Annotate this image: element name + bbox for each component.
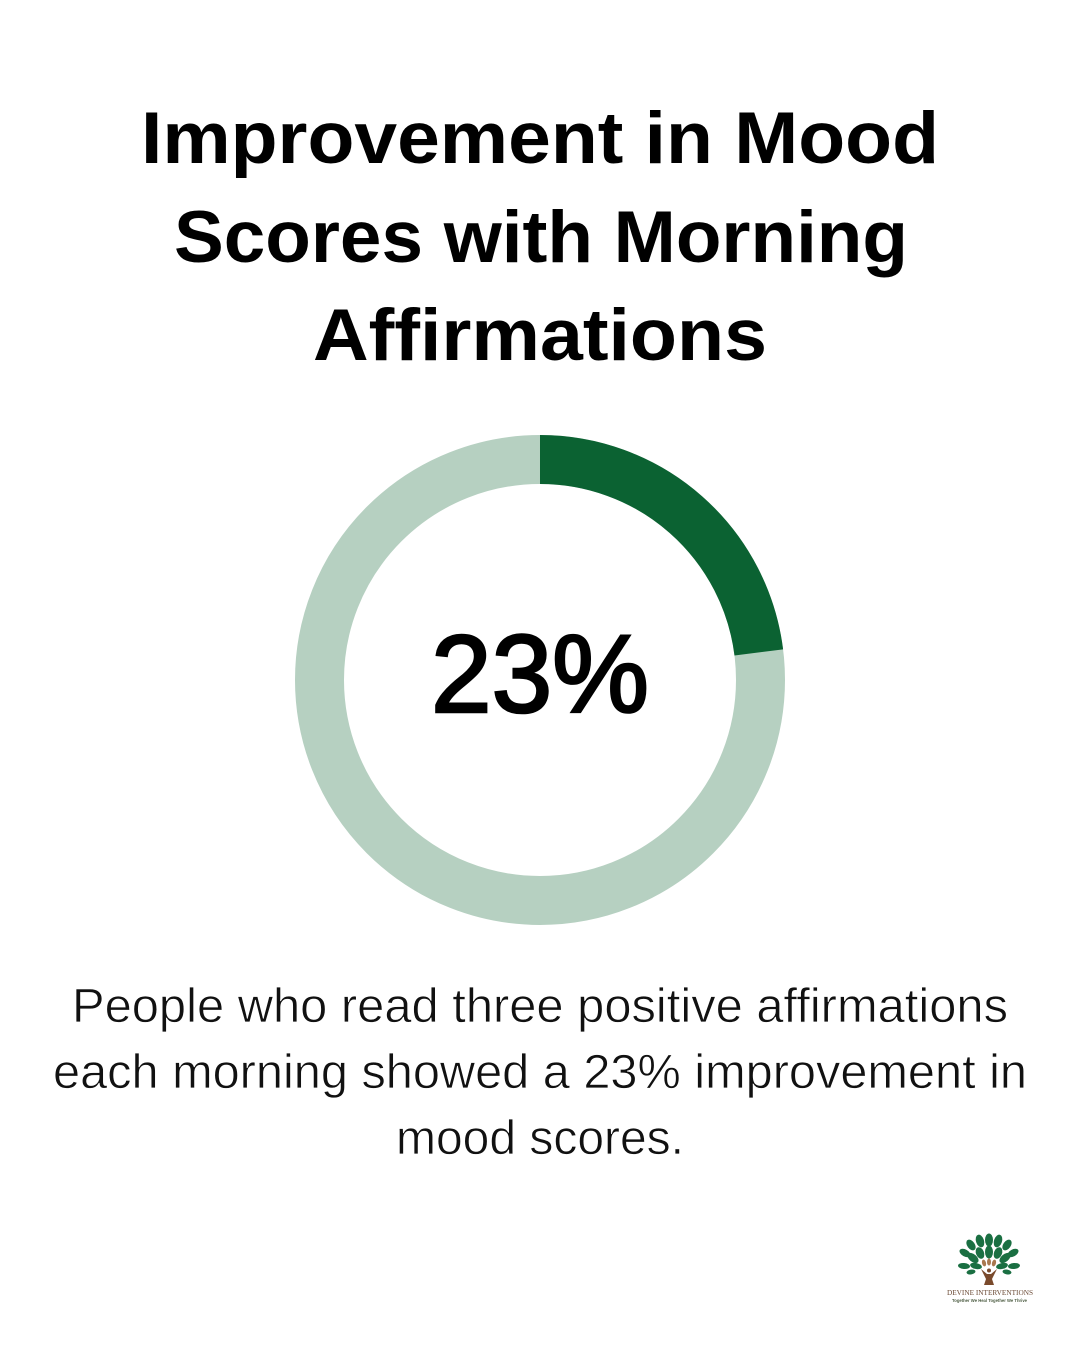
title (141, 98, 939, 376)
description: each morning showed a 23% improvement in (53, 1046, 1027, 1099)
logo tagline: Together We Heal Together We Thrive (952, 1298, 1027, 1303)
logo name: DEVINE INTERVENTIONS (947, 1289, 1033, 1297)
description: mood scores. (396, 1112, 684, 1165)
icon: tree leaves (958, 1234, 1020, 1275)
donut chart (320, 460, 760, 900)
logo: Devine Interventions (947, 1234, 1033, 1303)
title: Affirmations (313, 295, 767, 376)
title: Scores with Morning (174, 197, 908, 278)
icon: tree trunk figure (981, 1258, 997, 1285)
title: Improvement in Mood (141, 98, 939, 179)
donut value: 23% (431, 613, 649, 736)
description (53, 980, 1027, 1165)
description: People who read three positive affirmations (72, 980, 1008, 1033)
